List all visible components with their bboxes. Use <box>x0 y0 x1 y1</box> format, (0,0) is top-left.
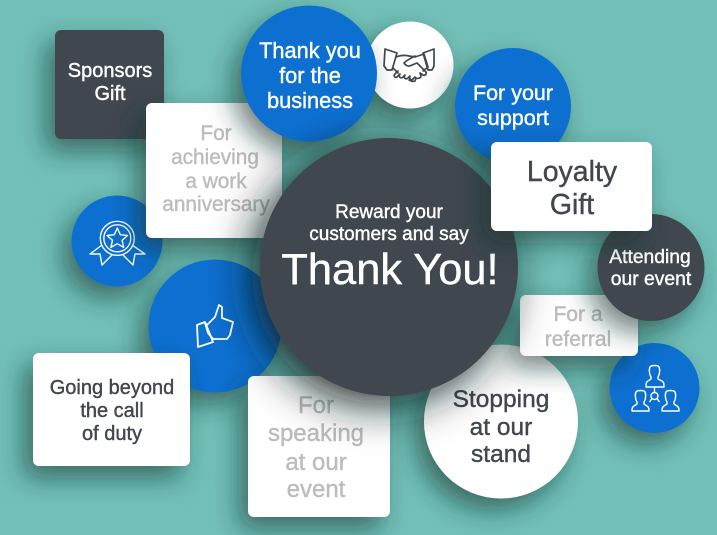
circle: thumbs up <box>148 260 282 392</box>
card: For achieving a work anniversary: anniversary <box>162 193 270 216</box>
circle: group <box>610 343 700 433</box>
circle: Stopping at our stand: stand <box>471 441 531 468</box>
card: Going beyond the call of duty: Going beyond <box>50 377 174 399</box>
circle: For your support: support <box>477 106 549 130</box>
main circle: Thank You <box>260 138 518 396</box>
card: Going beyond the call of duty: of duty <box>82 423 142 445</box>
card: Sponsors Gift: Sponsors <box>68 60 152 82</box>
circle: Stopping at our stand: at our <box>470 414 532 441</box>
card: For speaking at our event: event <box>287 476 346 503</box>
card: For a referral: For a <box>553 303 603 326</box>
circle: Thank you for the business: Thank you <box>259 38 361 63</box>
card: Sponsors Gift <box>55 30 164 139</box>
card: Loyalty Gift <box>491 142 652 231</box>
main circle: Thank You: Thank You! <box>281 246 499 294</box>
card: For achieving a work anniversary: achieving <box>171 146 259 169</box>
card: Going beyond the call of duty: the call <box>80 400 144 422</box>
circle: For your support: For your <box>473 81 553 105</box>
card: Loyalty Gift: Gift <box>550 189 594 221</box>
card: Going beyond the call of duty <box>33 353 190 466</box>
card: For a referral <box>520 295 638 356</box>
circle: Thank you for the business: for the <box>279 63 341 88</box>
circle: Thank you for the business: business <box>267 88 353 113</box>
card: For speaking at our event: at our <box>285 449 347 476</box>
card: For achieving a work anniversary <box>146 103 282 238</box>
card: For achieving a work anniversary: For <box>200 122 232 145</box>
card: For speaking at our event: For <box>298 392 334 419</box>
circle: handshake <box>366 22 454 108</box>
circle: Stopping at our stand: Stopping <box>453 386 549 413</box>
circle: Thank you for the business <box>241 6 377 142</box>
card: For speaking at our event: speaking <box>268 420 364 447</box>
card: For a referral: referral <box>545 328 611 351</box>
main circle: Thank You: customers and say <box>309 224 469 245</box>
circle: For your support <box>455 48 571 164</box>
circle: Attending our event: our event <box>611 269 692 290</box>
circle: Stopping at our stand <box>424 344 578 498</box>
circle: Attending our event <box>598 214 704 321</box>
card: Sponsors Gift: Gift <box>94 83 126 105</box>
main circle: Thank You: Reward your <box>335 202 444 223</box>
card: For achieving a work anniversary: a work <box>185 170 247 193</box>
circle: Attending our event: Attending <box>609 247 691 268</box>
card: For speaking at our event <box>248 376 390 517</box>
circle: medal <box>72 196 162 286</box>
card: Loyalty Gift: Loyalty <box>527 156 618 188</box>
